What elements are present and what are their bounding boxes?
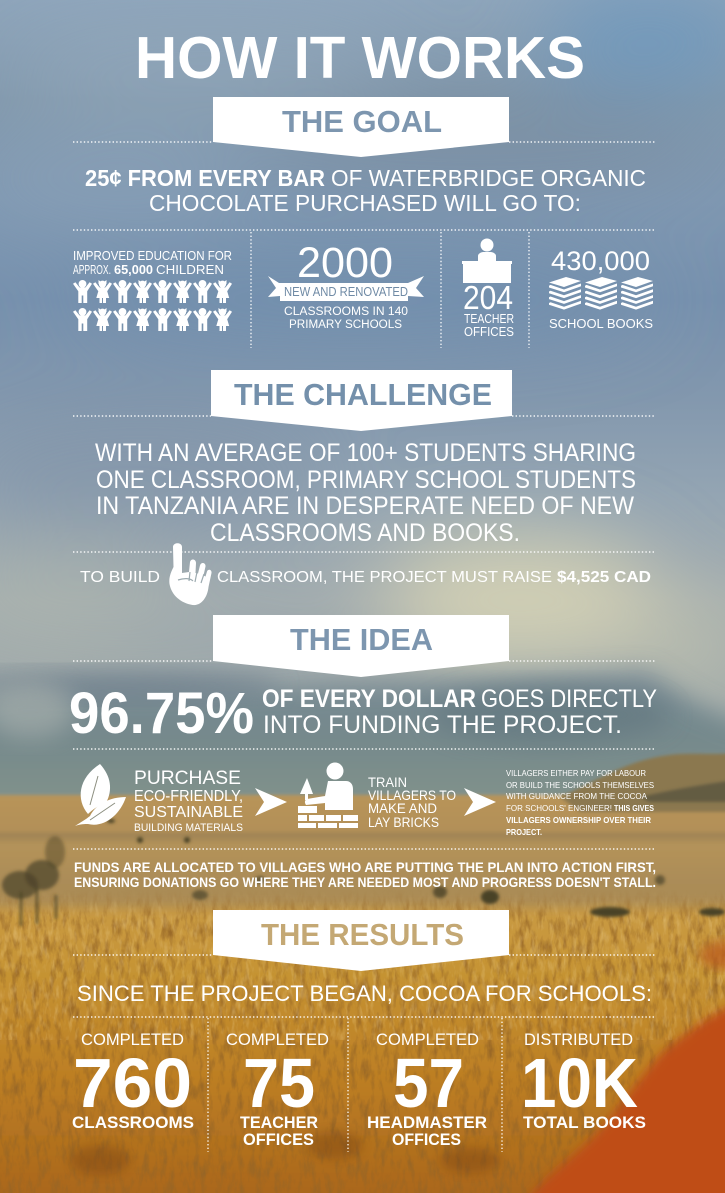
banner: the goal: THE GOAL [282,104,442,139]
step: villagers ownership: PROJECT. [506,827,542,837]
stat: school books [549,246,653,331]
cost to build one classroom [80,543,651,605]
stat: 96.75% of every dollar: OF EVERY DOLLAR [262,685,476,713]
challenge statement: WITH AN AVERAGE OF 100+ STUDENTS SHARING [95,439,636,467]
step: villagers ownership: FOR SCHOOLS' ENGINEER! [506,803,612,813]
icon: hand showing one finger [169,543,212,605]
banner: the challenge: THE CHALLENGE [234,377,492,412]
dark grass patches [70,1131,500,1175]
funds allocation note [74,859,656,890]
icon: teacher at desk [462,238,512,283]
arrow [464,788,496,816]
stat: 760 classrooms: CLASSROOMS [72,1114,194,1132]
step: villagers ownership: VILLAGERS EITHER PAY FOR LABOUR [506,768,646,778]
step: train villagers: VILLAGERS TO [368,787,456,803]
stat: school books: 430,000 [551,246,650,276]
stat: 10K total books: 10K [521,1044,638,1122]
stat: 2000 classrooms: CLASSROOMS IN 140 [284,306,408,318]
stat: 57 headmaster offices: HEADMASTER [367,1114,487,1132]
banner: the idea [213,615,509,677]
icon: stacks of books [549,277,653,310]
challenge statement: CLASSROOMS AND BOOKS. [210,519,520,547]
step: purchase materials: ECO-FRIENDLY, [134,788,243,805]
cost to build one classroom: $4,525 CAD [557,569,651,586]
stat: teacher offices: 204 [463,279,513,316]
goal statement: CHOCOLATE PURCHASED WILL GO TO: [149,190,581,216]
funds allocation note: ENSURING DONATIONS GO WHERE THEY ARE NEEDED MOST AND PROGRESS DOESN'T STALL. [74,874,656,890]
stat: 96.75% of every dollar: INTO FUNDING THE PROJECT. [263,711,622,739]
stat: 57 headmaster offices: OFFICES [392,1131,461,1149]
cost to build one classroom: TO BUILD [80,569,160,586]
stat: 75 teacher offices: OFFICES [243,1131,314,1149]
banner: the goal [213,97,509,157]
stat: 2000 classrooms: PRIMARY SCHOOLS [289,319,402,331]
red dirt road [520,1000,725,1193]
stat: 2000 classrooms: 2000 [297,239,393,287]
step: villagers ownership: OR BUILD THE SCHOOLS THEMSELVES [506,780,654,790]
goal statement: 25¢ FROM EVERY BAR [85,165,325,191]
stat: school books: SCHOOL BOOKS [549,316,653,331]
stat: teacher offices: TEACHER [464,312,514,326]
results statement: SINCE THE PROJECT BEGAN, COCOA FOR SCHOOLS: [77,981,652,1006]
stat: 57 headmaster offices [367,1030,487,1149]
challenge statement: ONE CLASSROOM, PRIMARY SCHOOL STUDENTS [96,466,636,494]
stat: 75 teacher offices [226,1030,329,1149]
title: HOW IT WORKS [135,25,585,91]
stat: improved education: 65,000 [114,263,153,277]
arrow [255,788,287,816]
acacia tree and shrubs [2,819,725,926]
goal statement [85,165,646,216]
step: purchase materials: BUILDING MATERIALS [134,822,243,834]
stat: 75 teacher offices: TEACHER [240,1114,318,1132]
stat: 57 headmaster offices: 57 [393,1044,464,1122]
cost to build one classroom: CLASSROOM, THE PROJECT MUST RAISE [217,569,552,586]
step: villagers ownership: THIS GIVES [614,803,654,813]
stat: 10K total books: TOTAL BOOKS [523,1114,646,1132]
banner: the challenge [211,370,512,431]
stat: 96.75% of every dollar: GOES DIRECTLY [481,685,657,713]
stat: 96.75% of every dollar [69,681,657,746]
stat: 75 teacher offices: 75 [243,1044,315,1122]
banner: the results: THE RESULTS [261,917,464,952]
stat: 10K total books: DISTRIBUTED [524,1030,633,1049]
golden grass field [0,908,725,1193]
icon: worker laying bricks [298,762,358,828]
stat: improved education: IMPROVED EDUCATION FOR [73,249,232,263]
goal statement: OF WATERBRIDGE ORGANIC [331,165,646,191]
step: train villagers: LAY BRICKS [368,814,439,830]
challenge statement: IN TANZANIA ARE IN DESPERATE NEED OF NEW [96,492,634,520]
step: villagers ownership: VILLAGERS OWNERSHIP OVER THEIR [506,815,651,825]
step: villagers ownership: WITH GUIDANCE FROM THE COCOA [506,791,647,801]
stat: 760 classrooms: 760 [73,1044,192,1122]
stat: 2000 classrooms [268,239,424,331]
stat: 760 classrooms: COMPLETED [81,1030,184,1049]
stat: teacher offices [462,238,514,339]
stat: improved education: CHILDREN [156,263,224,277]
step: purchase materials: SUSTAINABLE [134,804,243,821]
stat: 2000 classrooms: NEW AND RENOVATED [284,285,408,299]
stat: improved education: APPROX. [73,263,111,277]
funds allocation note: FUNDS ARE ALLOCATED TO VILLAGES WHO ARE PUTTING THE PLAN INTO ACTION FIRST, [74,859,656,875]
step: villagers ownership [506,768,654,837]
distant mountains [0,672,725,820]
banner: the idea: THE IDEA [290,622,433,657]
stat: 96.75% of every dollar: 96.75% [69,681,254,746]
ribbon [268,276,424,301]
step: train villagers [298,762,456,830]
stat: improved education [73,249,232,331]
icon: leaves [75,764,126,826]
challenge statement [95,439,636,547]
step: purchase materials: PURCHASE [134,767,241,789]
stat: 57 headmaster offices: COMPLETED [376,1030,479,1049]
icon: rows of children [73,280,232,331]
plain [0,795,725,920]
stat: 75 teacher offices: COMPLETED [226,1030,329,1049]
step: train villagers: TRAIN [368,774,407,790]
banner: the results [213,910,509,971]
step: purchase materials [75,764,243,834]
step: train villagers: MAKE AND [368,800,437,816]
stat: teacher offices: OFFICES [464,325,514,339]
